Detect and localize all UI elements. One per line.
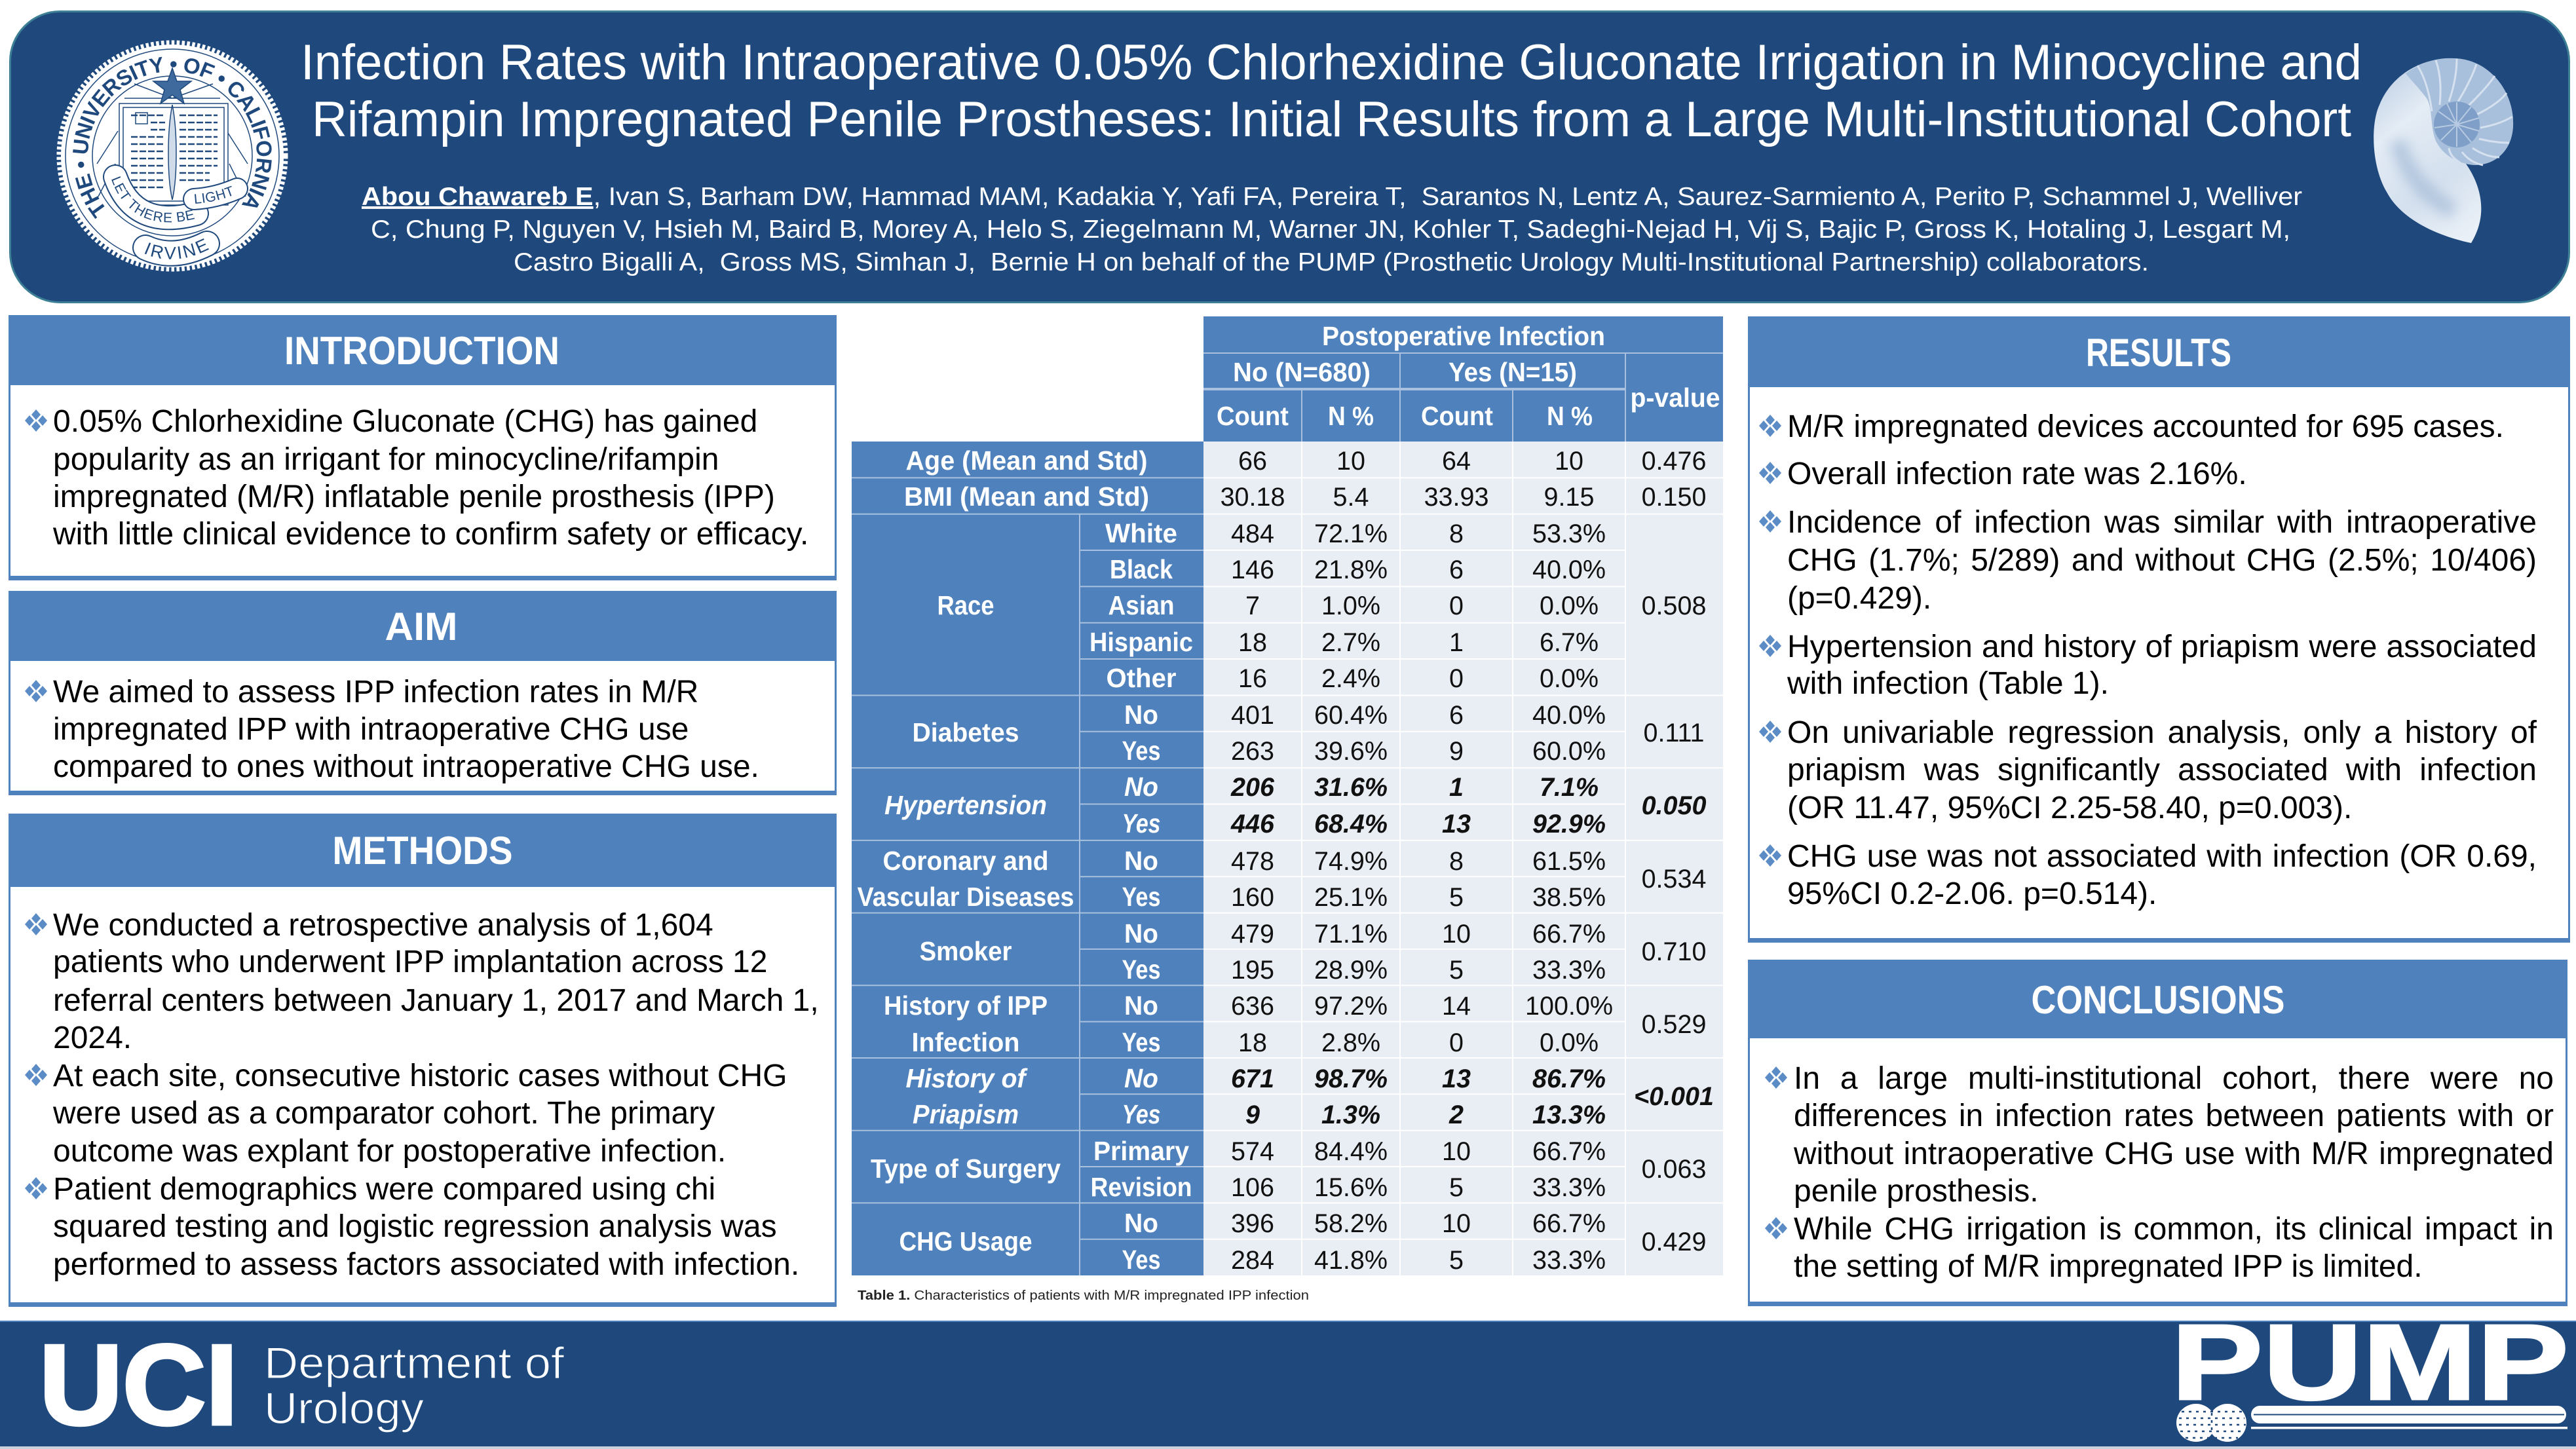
rows: hypertension: 31.6% bbox=[1314, 773, 1388, 802]
panel: conclusions bbox=[1748, 960, 2567, 1306]
text: conclusions: differences in infection rates between patients with or bbox=[1794, 1099, 2554, 1133]
rows: coronary and vascular diseases bbox=[857, 846, 1706, 912]
panel: introduction bbox=[9, 315, 837, 580]
rows: type of surgery: Revision bbox=[1090, 1172, 1192, 1202]
rows: hypertension: 0.050 bbox=[1642, 791, 1706, 820]
rows: race: 2.7% bbox=[1321, 628, 1380, 657]
logo: UCI Department of Urology: Department of bbox=[264, 1338, 564, 1388]
table header bbox=[1217, 321, 1720, 431]
text: results: CHG (1.7%; 5/289) and without CHG (2.5%; 10/406) bbox=[1787, 543, 2537, 578]
heading: conclusions: CONCLUSIONS bbox=[2031, 978, 2285, 1022]
table bbox=[852, 316, 1723, 1275]
rows: coronary and vascular diseases: 25.1% bbox=[1314, 883, 1388, 912]
rows: CHG usage: 284 bbox=[1231, 1246, 1274, 1275]
heading: methods bbox=[9, 814, 837, 887]
text: introduction: popularity as an irrigant for minocycline/rifampin bbox=[53, 442, 719, 477]
heading: results: RESULTS bbox=[2086, 331, 2231, 375]
text: results: M/R impregnated devices accounted for 695 cases. bbox=[1787, 409, 2504, 444]
rows: smoker: No bbox=[1124, 918, 1158, 949]
rows: race: Other bbox=[1106, 663, 1177, 693]
icon: bullet bbox=[1764, 1217, 1788, 1239]
rows: coronary and vascular diseases: 478 bbox=[1231, 847, 1274, 876]
text: conclusions: the setting of M/R impregnated IPP is limited. bbox=[1794, 1249, 2423, 1284]
rows: CHG usage: 66.7% bbox=[1532, 1209, 1606, 1238]
icon: bullet bbox=[1758, 415, 1782, 437]
row: age: 64 bbox=[1442, 447, 1471, 476]
table header: No (N=680) bbox=[1233, 357, 1371, 387]
text: results: CHG use was not associated with infection (OR 0.69, bbox=[1787, 839, 2537, 874]
rows: diabetes: 0.111 bbox=[1644, 719, 1704, 747]
text: methods: At each site, consecutive historic cases without CHG bbox=[53, 1059, 787, 1093]
rows: history of priapism bbox=[905, 1063, 1714, 1129]
table background blocks bbox=[852, 316, 1723, 1275]
rows: smoker: 10 bbox=[1442, 920, 1471, 949]
text: methods: We conducted a retrospective analysis of 1,604 bbox=[53, 908, 713, 943]
text: methods: squared testing and logistic regression analysis was bbox=[53, 1209, 777, 1244]
rows: history of IPP infection: 18 bbox=[1238, 1028, 1267, 1057]
rows: diabetes: 40.0% bbox=[1532, 701, 1606, 730]
rows: hypertension: 446 bbox=[1230, 810, 1275, 838]
table header: N % bbox=[1547, 401, 1593, 431]
rows: history of priapism: No bbox=[1124, 1063, 1158, 1093]
text: results: Overall infection rate was 2.16%. bbox=[1787, 457, 2247, 491]
rows: smoker: Yes bbox=[1122, 954, 1161, 985]
rows: type of surgery: 0.063 bbox=[1642, 1155, 1706, 1184]
rows: history of IPP infection: 0.0% bbox=[1540, 1028, 1599, 1057]
rows: type of surgery: 33.3% bbox=[1532, 1173, 1606, 1202]
rows: history of priapism: 9 bbox=[1245, 1101, 1260, 1129]
icon: bullet bbox=[1758, 510, 1782, 533]
row: BMI: 0.150 bbox=[1642, 483, 1706, 512]
rows: diabetes: 401 bbox=[1231, 701, 1274, 730]
header banner bbox=[9, 10, 2570, 303]
rows: hypertension: 68.4% bbox=[1314, 810, 1388, 838]
table header: Postoperative Infection bbox=[1322, 321, 1605, 351]
logo: PUMP bbox=[2171, 1302, 2569, 1442]
text: methods: 2024. bbox=[53, 1021, 132, 1055]
authors: Castro Bigalli A, Gross MS, Simhan J, Bernie H on behalf of the PUMP (Prosthetic Urology Multi-Institutional Partnership) collaborators. bbox=[514, 248, 2149, 276]
text: methods: patients who underwent IPP implantation across 12 bbox=[53, 945, 767, 979]
rows: race: 6.7% bbox=[1540, 628, 1599, 657]
icon: bullet bbox=[24, 1064, 48, 1086]
rows: race: 484 bbox=[1231, 519, 1274, 548]
rows: CHG usage: Yes bbox=[1122, 1245, 1161, 1275]
icon: bullet bbox=[25, 680, 47, 702]
title: Rifampin Impregnated Penile Prostheses: Initial Results from a Large Multi-Institutional Cohort bbox=[312, 92, 2351, 147]
rows: coronary and vascular diseases: Vascular Diseases bbox=[857, 882, 1074, 912]
rows: diabetes: 60.4% bbox=[1314, 701, 1388, 730]
text: aim: compared to ones without intraoperative CHG use. bbox=[53, 749, 759, 784]
rows: type of surgery: 10 bbox=[1442, 1137, 1471, 1166]
rows: coronary and vascular diseases: 160 bbox=[1231, 883, 1274, 912]
heading: aim: AIM bbox=[385, 605, 457, 649]
text: methods: outcome was explant for postoperative infection. bbox=[53, 1134, 726, 1169]
icon: bullet bbox=[1758, 462, 1782, 484]
rows: diabetes: Diabetes bbox=[912, 717, 1019, 747]
rows: history of priapism: 671 bbox=[1231, 1064, 1274, 1093]
text: results: with infection (Table 1). bbox=[1787, 666, 2109, 701]
rows: race: 18 bbox=[1238, 628, 1267, 657]
rows: CHG usage: 0.429 bbox=[1642, 1228, 1706, 1256]
rows: CHG usage: No bbox=[1124, 1208, 1158, 1238]
rows: coronary and vascular diseases: No bbox=[1124, 846, 1158, 876]
rows: coronary and vascular diseases: 5 bbox=[1449, 883, 1464, 912]
rows: hypertension: 92.9% bbox=[1532, 810, 1606, 838]
rows: diabetes: Yes bbox=[1122, 736, 1161, 766]
rows: smoker: Smoker bbox=[920, 936, 1012, 966]
rows: smoker: 33.3% bbox=[1532, 956, 1606, 985]
rows: history of IPP infection: 0 bbox=[1449, 1028, 1464, 1057]
row: age: 0.476 bbox=[1642, 447, 1706, 476]
title bbox=[301, 35, 2362, 147]
icon: university seal: IRVINE bbox=[144, 238, 209, 259]
rows: race: 16 bbox=[1238, 664, 1267, 693]
rows: diabetes: 263 bbox=[1231, 737, 1274, 766]
rows: race: 8 bbox=[1449, 519, 1464, 548]
rows: smoker: 5 bbox=[1449, 956, 1464, 985]
table header: Yes (N=15) bbox=[1449, 357, 1577, 387]
rows: hypertension: 1 bbox=[1449, 773, 1464, 802]
rows: CHG usage: 5 bbox=[1449, 1246, 1464, 1275]
rows: race: 0.0% bbox=[1540, 592, 1599, 620]
panel: results bbox=[1748, 316, 2570, 943]
rows: smoker: 195 bbox=[1231, 956, 1274, 985]
rows: history of priapism: 98.7% bbox=[1314, 1064, 1388, 1093]
text: conclusions: In a large multi-institutional cohort, there were no bbox=[1794, 1061, 2554, 1096]
rows: coronary and vascular diseases: Coronary and bbox=[883, 846, 1048, 876]
rows: CHG usage: 58.2% bbox=[1314, 1209, 1388, 1238]
rows: CHG usage: 10 bbox=[1442, 1209, 1471, 1238]
rows: type of surgery: 106 bbox=[1231, 1173, 1274, 1202]
table header: N % bbox=[1328, 401, 1374, 431]
rows: race: 2.4% bbox=[1321, 664, 1380, 693]
rows: coronary and vascular diseases: 61.5% bbox=[1532, 847, 1606, 876]
rows: CHG usage: CHG Usage bbox=[899, 1226, 1032, 1256]
icon: bullet bbox=[1764, 1066, 1788, 1089]
text: introduction: impregnated (M/R) inflatable penile prosthesis (IPP) bbox=[53, 480, 775, 514]
heading: aim bbox=[9, 591, 837, 661]
row: BMI bbox=[904, 481, 1706, 512]
rows: history of IPP infection: 14 bbox=[1442, 992, 1471, 1021]
heading: introduction: INTRODUCTION bbox=[284, 329, 559, 373]
text: results bbox=[1787, 408, 2537, 913]
rows: history of IPP infection: Infection bbox=[912, 1027, 1019, 1057]
rows: hypertension bbox=[884, 772, 1706, 838]
rows: race: Race bbox=[937, 590, 994, 620]
rows: type of surgery: Primary bbox=[1093, 1136, 1189, 1166]
text: results: Incidence of infection was similar with intraoperative bbox=[1787, 505, 2537, 540]
table header: p-value bbox=[1630, 383, 1720, 413]
footer bar bbox=[0, 1302, 2576, 1449]
row: age: Age (Mean and Std) bbox=[905, 445, 1148, 476]
rows: type of surgery: 66.7% bbox=[1532, 1137, 1606, 1166]
rows: race: 0.0% bbox=[1540, 664, 1599, 693]
rows: race: 40.0% bbox=[1532, 555, 1606, 584]
text: conclusions: While CHG irrigation is common, its clinical impact in bbox=[1794, 1212, 2554, 1247]
text: results: (p=0.429). bbox=[1787, 581, 1931, 616]
rows: race: 6 bbox=[1449, 555, 1464, 584]
row: age: 10 bbox=[1336, 447, 1365, 476]
icon: bullet bbox=[24, 913, 48, 935]
table header: Count bbox=[1421, 401, 1493, 431]
text: aim: impregnated IPP with intraoperative CHG use bbox=[53, 712, 689, 747]
row: BMI: BMI (Mean and Std) bbox=[904, 481, 1149, 512]
heading: methods: METHODS bbox=[333, 829, 512, 873]
rows: history of IPP infection: 2.8% bbox=[1321, 1028, 1380, 1057]
authors bbox=[362, 183, 2302, 276]
rows: history of priapism: 2 bbox=[1449, 1101, 1464, 1129]
logo: PUMP: PUMP bbox=[2171, 1302, 2569, 1422]
rows: smoker: 66.7% bbox=[1532, 920, 1606, 949]
text: results: priapism was significantly associated with infection bbox=[1787, 753, 2537, 787]
rows: coronary and vascular diseases: 38.5% bbox=[1532, 883, 1606, 912]
rows: race: 0 bbox=[1449, 664, 1464, 693]
rows: diabetes: 60.0% bbox=[1532, 737, 1606, 766]
rows: smoker: 0.710 bbox=[1642, 937, 1706, 966]
rows: CHG usage: 396 bbox=[1231, 1209, 1274, 1238]
rows: diabetes: No bbox=[1124, 700, 1158, 730]
text: results: 95%CI 0.2-2.06. p=0.514). bbox=[1787, 876, 2157, 911]
rows: race: 7 bbox=[1245, 592, 1260, 620]
logo: UCI Department of Urology: UCI bbox=[39, 1321, 238, 1448]
rows: smoker: 71.1% bbox=[1314, 920, 1388, 949]
rows: diabetes: 6 bbox=[1449, 701, 1464, 730]
table caption: Table 1. Characteristics of patients with M/R impregnated IPP infection bbox=[858, 1289, 1309, 1303]
icon: bullet bbox=[1758, 721, 1782, 743]
text: conclusions bbox=[1794, 1060, 2554, 1286]
heading: introduction bbox=[9, 315, 837, 385]
text: introduction: with little clinical evidence to confirm safety or efficacy. bbox=[53, 517, 808, 552]
rows: type of surgery: 15.6% bbox=[1314, 1173, 1388, 1202]
row: BMI: 9.15 bbox=[1544, 483, 1594, 512]
heading: results bbox=[1748, 316, 2570, 387]
row: age: 66 bbox=[1238, 447, 1267, 476]
panel: methods bbox=[9, 814, 837, 1307]
text: results: Hypertension and history of priapism were associated bbox=[1787, 630, 2537, 664]
text: methods: performed to assess factors associated with infection. bbox=[53, 1247, 799, 1282]
text: methods bbox=[53, 907, 833, 1284]
rows: type of surgery: Type of Surgery bbox=[871, 1154, 1061, 1184]
text: introduction bbox=[53, 404, 808, 552]
text: results: On univariable regression analysis, only a history of bbox=[1787, 715, 2537, 750]
rows: race: Black bbox=[1110, 554, 1173, 584]
logo: UCI Department of Urology bbox=[39, 1321, 564, 1448]
rows: history of IPP infection: History of IPP bbox=[884, 990, 1048, 1021]
icon: university seal: THE • UNIVERSITY • OF • CALIFORNIA bbox=[73, 56, 272, 219]
text: conclusions: penile prosthesis. bbox=[1794, 1174, 2039, 1209]
text: results: (OR 11.47, 95%CI 2.25-58.40, p=0.003). bbox=[1787, 791, 2352, 825]
row: BMI: 30.18 bbox=[1221, 483, 1285, 512]
rows: race: 146 bbox=[1231, 555, 1274, 584]
rows: hypertension: Hypertension bbox=[884, 790, 1047, 820]
rows: diabetes: 39.6% bbox=[1314, 737, 1388, 766]
rows: history of IPP infection: 636 bbox=[1231, 992, 1274, 1021]
rows: smoker: 479 bbox=[1231, 920, 1274, 949]
rows: smoker bbox=[920, 918, 1706, 985]
rows: hypertension: 13 bbox=[1442, 810, 1471, 838]
authors: C, Chung P, Nguyen V, Hsieh M, Baird B, Morey A, Helo S, Ziegelmann M, Warner JN, Kohler T, Sadeghi-Nejad H, Vij S, Bajic P, Gross K, Hotaling J, Lesgart M, bbox=[371, 216, 2290, 244]
rows: coronary and vascular diseases: 0.534 bbox=[1642, 865, 1706, 894]
icon: bullet bbox=[25, 409, 47, 432]
rows: history of IPP infection bbox=[884, 990, 1706, 1057]
rows: type of surgery: 5 bbox=[1449, 1173, 1464, 1202]
row: BMI: 33.93 bbox=[1424, 483, 1488, 512]
rows: hypertension: No bbox=[1124, 772, 1158, 802]
rows: race: 1 bbox=[1449, 628, 1464, 657]
rows: diabetes: 9 bbox=[1449, 737, 1464, 766]
rows: type of surgery: 574 bbox=[1231, 1137, 1274, 1166]
icon: bullet bbox=[1758, 635, 1782, 657]
icon: university seal: LET THERE BE bbox=[111, 176, 195, 223]
rows: history of priapism: Priapism bbox=[913, 1099, 1019, 1129]
rows: race: 0 bbox=[1449, 592, 1464, 620]
rows: diabetes bbox=[912, 700, 1704, 766]
text: conclusions: without intraoperative CHG use with M/R impregnated bbox=[1794, 1137, 2554, 1171]
rows: history of IPP infection: No bbox=[1124, 990, 1158, 1021]
rows: history of IPP infection: 97.2% bbox=[1314, 992, 1388, 1021]
rows: history of priapism: 1.3% bbox=[1321, 1101, 1380, 1129]
text: methods: Patient demographics were compared using chi bbox=[53, 1172, 715, 1207]
icon: university seal bbox=[56, 41, 288, 271]
text: aim bbox=[53, 673, 833, 786]
text: introduction: 0.05% Chlorhexidine Gluconate (CHG) has gained bbox=[53, 404, 757, 439]
rows: history of IPP infection: Yes bbox=[1122, 1027, 1161, 1057]
icon: nautilus shell bbox=[2374, 58, 2513, 243]
table header: Count bbox=[1217, 401, 1289, 431]
rows: coronary and vascular diseases: 74.9% bbox=[1314, 847, 1388, 876]
rows: history of IPP infection: 0.529 bbox=[1642, 1010, 1706, 1039]
rows: coronary and vascular diseases: Yes bbox=[1122, 882, 1161, 912]
icon: university seal: LIGHT bbox=[195, 186, 232, 204]
rows: hypertension: Yes bbox=[1122, 808, 1161, 838]
rows: hypertension: 7.1% bbox=[1540, 773, 1599, 802]
authors: Abou Chawareb E , Ivan S, Barham DW, Hammad MAM, Kadakia Y, Yafi FA, Pereira T, Sarantos N, Lentz A, Saurez-Sarmiento A, Perito P, Schammel J, Welliver bbox=[362, 183, 2302, 211]
rows: history of priapism: Yes bbox=[1122, 1099, 1161, 1129]
text: methods: referral centers between January 1, 2017 and March 1, bbox=[53, 983, 819, 1018]
icon: bullet bbox=[24, 1177, 48, 1199]
rows: type of surgery: 84.4% bbox=[1314, 1137, 1388, 1166]
rows: history of IPP infection: 100.0% bbox=[1525, 992, 1613, 1021]
text: aim: We aimed to assess IPP infection rates in M/R bbox=[53, 675, 698, 709]
rows: CHG usage: 33.3% bbox=[1532, 1246, 1606, 1275]
heading: conclusions bbox=[1748, 960, 2567, 1038]
row: age: 10 bbox=[1555, 447, 1583, 476]
row: BMI: 5.4 bbox=[1333, 483, 1369, 512]
rows: hypertension: 206 bbox=[1230, 773, 1275, 802]
rows: history of priapism: 86.7% bbox=[1532, 1064, 1606, 1093]
rows: CHG usage: 41.8% bbox=[1314, 1246, 1388, 1275]
rows: race bbox=[937, 518, 1706, 693]
rows: type of surgery bbox=[871, 1136, 1706, 1202]
rows: race: White bbox=[1105, 518, 1177, 548]
title: Infection Rates with Intraoperative 0.05% Chlorhexidine Gluconate Irrigation in Minocycline and bbox=[301, 35, 2362, 90]
rows: CHG usage bbox=[899, 1208, 1706, 1275]
rows: race: 72.1% bbox=[1314, 519, 1388, 548]
rows: smoker: 28.9% bbox=[1314, 956, 1388, 985]
rows: history of priapism: 13.3% bbox=[1532, 1101, 1606, 1129]
rows: history of priapism: 13 bbox=[1442, 1064, 1471, 1093]
icon: bullet bbox=[1758, 844, 1782, 867]
panel: aim bbox=[9, 591, 837, 795]
rows: race: 53.3% bbox=[1532, 519, 1606, 548]
rows: race: Asian bbox=[1108, 590, 1174, 620]
text: methods: were used as a comparator cohort. The primary bbox=[53, 1096, 715, 1131]
rows: race: 21.8% bbox=[1314, 555, 1388, 584]
rows: history of priapism: History of bbox=[905, 1063, 1029, 1093]
rows: race: Hispanic bbox=[1089, 627, 1193, 657]
logo: UCI Department of Urology: Urology bbox=[264, 1383, 424, 1433]
rows: race: 0.508 bbox=[1642, 592, 1706, 620]
rows: history of priapism: <0.001 bbox=[1634, 1082, 1714, 1111]
row: age bbox=[905, 445, 1706, 476]
rows: coronary and vascular diseases: 8 bbox=[1449, 847, 1464, 876]
rows: race: 1.0% bbox=[1321, 592, 1380, 620]
